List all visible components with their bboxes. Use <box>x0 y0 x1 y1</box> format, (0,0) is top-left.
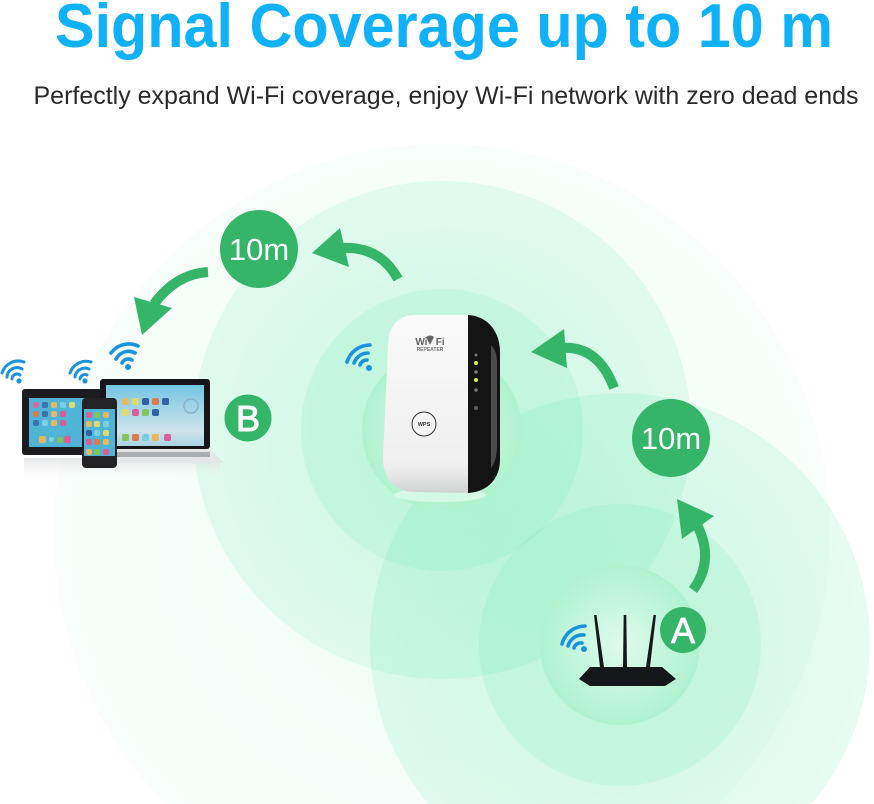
icon: wifi above laptop <box>111 344 138 370</box>
repeater label <box>415 336 445 353</box>
arrow: badge to devices <box>134 272 208 335</box>
tablet <box>22 389 102 455</box>
badge: A <box>660 607 706 653</box>
arrow: badge to repeater <box>531 329 614 388</box>
icon: wifi far left <box>2 361 24 384</box>
badge: 10m right: 10m <box>641 421 701 456</box>
repeater label: REPEATER <box>417 347 444 353</box>
repeater device <box>383 315 500 502</box>
router <box>579 615 676 686</box>
laptop <box>100 379 224 463</box>
devices: tablet, laptop, phone <box>22 379 224 482</box>
subtitle: Perfectly expand Wi-Fi coverage, enjoy Wi-Fi network with zero dead ends <box>34 82 858 110</box>
arrow: repeater to badge <box>312 228 398 279</box>
icon: wifi above tablet <box>70 361 91 384</box>
badge: B <box>224 394 272 442</box>
badge: 10m left <box>220 210 298 288</box>
repeater label: Wi Fi <box>415 337 445 348</box>
phone <box>82 398 117 468</box>
badge: B: B <box>236 398 260 439</box>
arrow: router to badge <box>677 499 714 590</box>
coverage circles <box>54 144 870 804</box>
WPS button: WPS <box>418 422 431 428</box>
icon: wifi at repeater <box>347 345 372 371</box>
icon: wifi at router <box>562 626 587 652</box>
WPS button <box>412 412 436 436</box>
badge: A: A <box>671 610 695 651</box>
badge: 10m right <box>632 399 710 477</box>
badge: 10m left: 10m <box>229 232 289 267</box>
